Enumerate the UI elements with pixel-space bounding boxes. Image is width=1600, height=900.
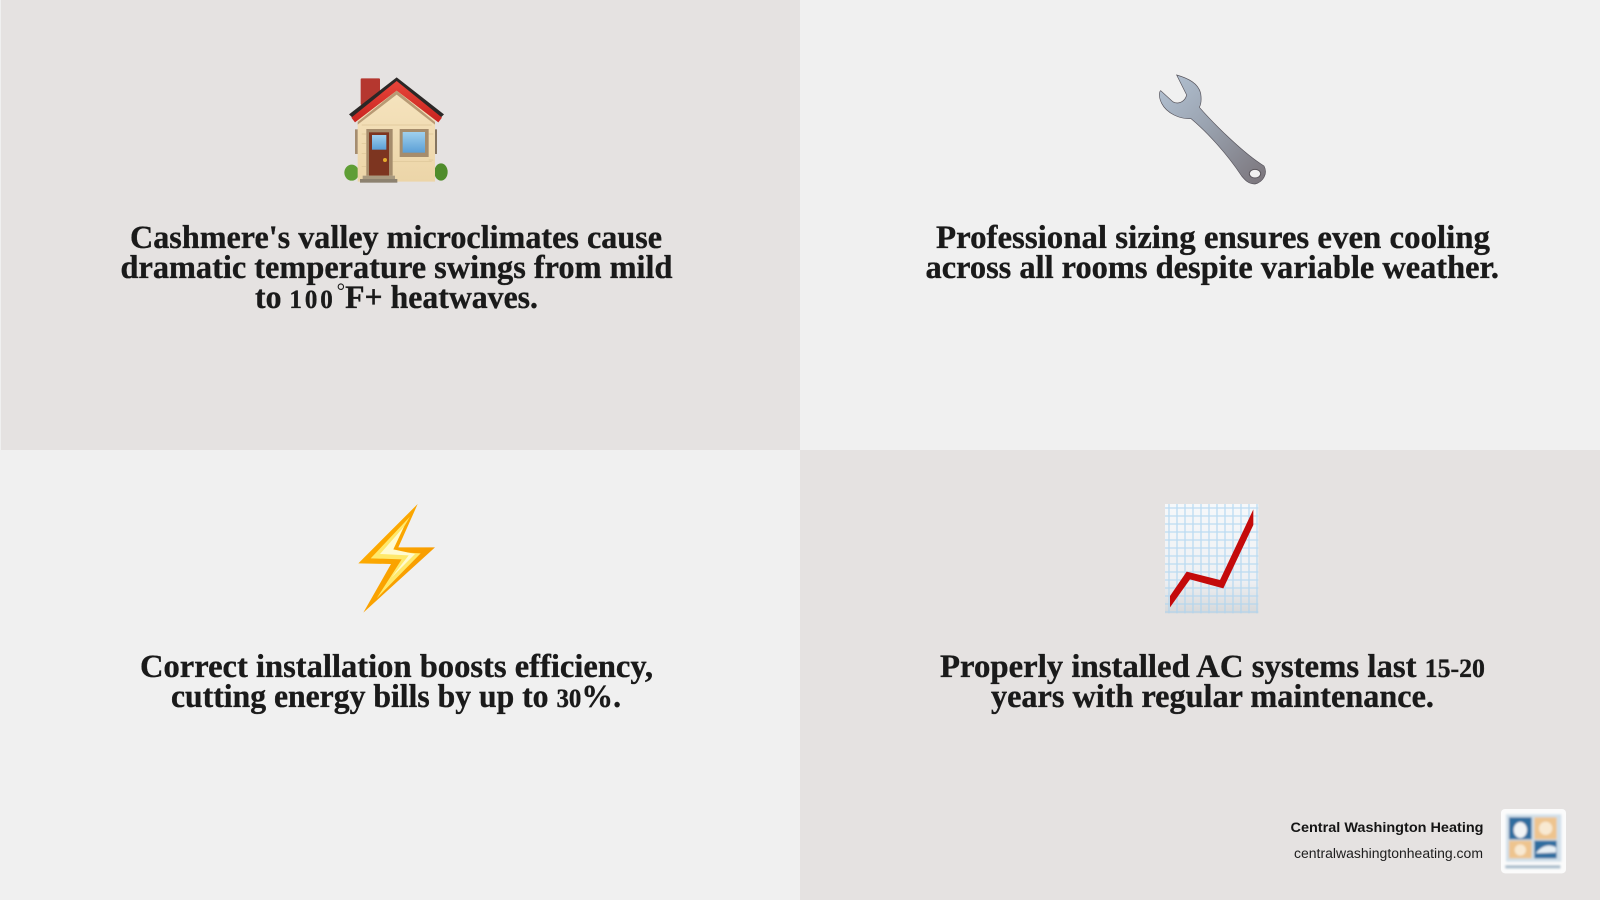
panel: bottom right background	[800, 450, 1600, 900]
panel: bottom left background	[0, 450, 800, 900]
heading: professional sizing: across all rooms despite variable weather.	[926, 250, 1499, 286]
icon: company logo	[1501, 809, 1566, 873]
panel: top left background	[1, 0, 800, 450]
heading: efficiency: Correct installation boosts efficiency,	[140, 649, 653, 685]
heading: lifespan: Properly installed AC systems last 15-20	[940, 649, 1485, 685]
brand name: Central Washington Heating	[1290, 819, 1484, 835]
heading: professional sizing	[926, 220, 1499, 286]
heading: microclimates: dramatic temperature swings from mild	[120, 250, 672, 286]
heading: efficiency: cutting energy bills by up to 30%.	[171, 679, 621, 715]
heading: microclimates: F+ heatwaves.	[345, 280, 538, 316]
brand website: centralwashingtonheating.com	[1294, 846, 1483, 861]
heading: efficiency	[140, 649, 653, 715]
icon: rising chart	[1165, 504, 1258, 613]
heading: microclimates: Cashmere's valley microclimates cause	[130, 220, 662, 256]
icon: lightning bolt	[358, 504, 435, 613]
heading: microclimates: °	[337, 278, 345, 303]
heading: lifespan	[940, 649, 1485, 715]
heading: microclimates: to 100	[255, 280, 337, 316]
heading: lifespan: years with regular maintenance.	[991, 679, 1434, 715]
heading: professional sizing: Professional sizing ensures even cooling	[936, 220, 1490, 256]
panel: top right background	[800, 0, 1600, 450]
icon: house	[344, 77, 448, 183]
heading: microclimates	[120, 220, 672, 316]
icon: wrench	[1159, 75, 1265, 184]
